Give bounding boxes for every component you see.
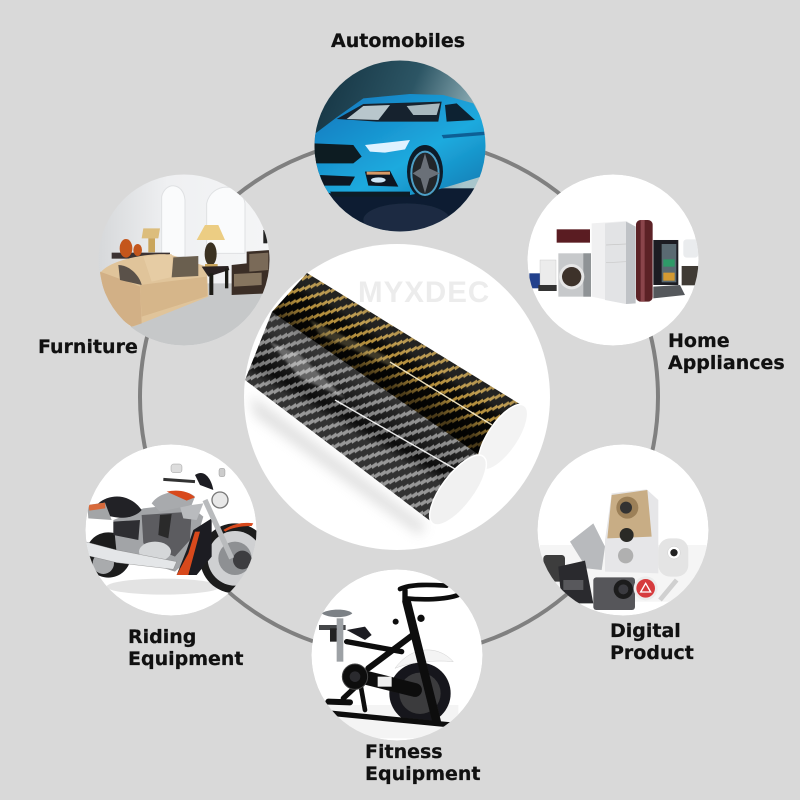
radiator shroud	[177, 518, 212, 575]
indoor camera	[605, 489, 658, 573]
panel: fitness equipment image	[312, 570, 482, 740]
label: Automobiles: Automobiles	[331, 30, 465, 52]
rear wheel	[86, 532, 131, 578]
side table left	[112, 253, 170, 259]
frame	[328, 585, 458, 725]
connecting ring	[140, 138, 658, 656]
panel: automobiles image	[314, 60, 486, 232]
grey action camera	[593, 577, 635, 610]
red alarm button	[634, 576, 658, 600]
label: Home Appliances: Home	[668, 330, 730, 352]
display cooler	[653, 240, 678, 285]
tower air conditioner	[636, 220, 653, 302]
car body	[313, 94, 487, 196]
floor	[130, 283, 270, 347]
tube shadow	[250, 395, 425, 535]
front wheel	[200, 523, 270, 593]
panel: central product circle	[244, 244, 550, 550]
fork and headlamp	[205, 500, 232, 558]
label: Riding Equipment: Equipment	[128, 648, 244, 670]
frame and engine	[113, 503, 203, 572]
label: Digital Product: Digital	[610, 620, 681, 642]
flywheel	[389, 663, 451, 724]
label: Fitness Equipment: Fitness	[365, 741, 443, 763]
sofa	[100, 254, 208, 327]
watermark: MYXDEC	[358, 276, 490, 309]
saddle	[322, 610, 352, 617]
panel: home appliances image	[528, 174, 698, 346]
arched windows	[162, 186, 185, 257]
silver carbon fibre roll	[245, 312, 496, 533]
label: Fitness Equipment: Equipment	[365, 763, 481, 785]
label: Riding Equipment: Riding	[128, 626, 196, 648]
rear seat and fender	[98, 497, 142, 518]
panel: furniture image	[98, 174, 272, 347]
armchair	[232, 250, 270, 295]
lamp and end table	[197, 225, 225, 240]
fridge	[592, 221, 636, 304]
fuel tank	[152, 492, 195, 508]
panel: riding equipment image	[85, 444, 270, 616]
exhausts	[85, 542, 177, 569]
small white camera	[658, 538, 688, 577]
gold carbon fibre roll	[272, 273, 537, 477]
washing machine	[558, 253, 591, 297]
label: Home Appliances: Appliances	[668, 352, 785, 374]
label: Digital Product: Product	[610, 642, 694, 664]
action camera display	[558, 561, 593, 603]
label: Furniture: Furniture	[38, 336, 138, 358]
panel: digital product image	[538, 444, 708, 616]
